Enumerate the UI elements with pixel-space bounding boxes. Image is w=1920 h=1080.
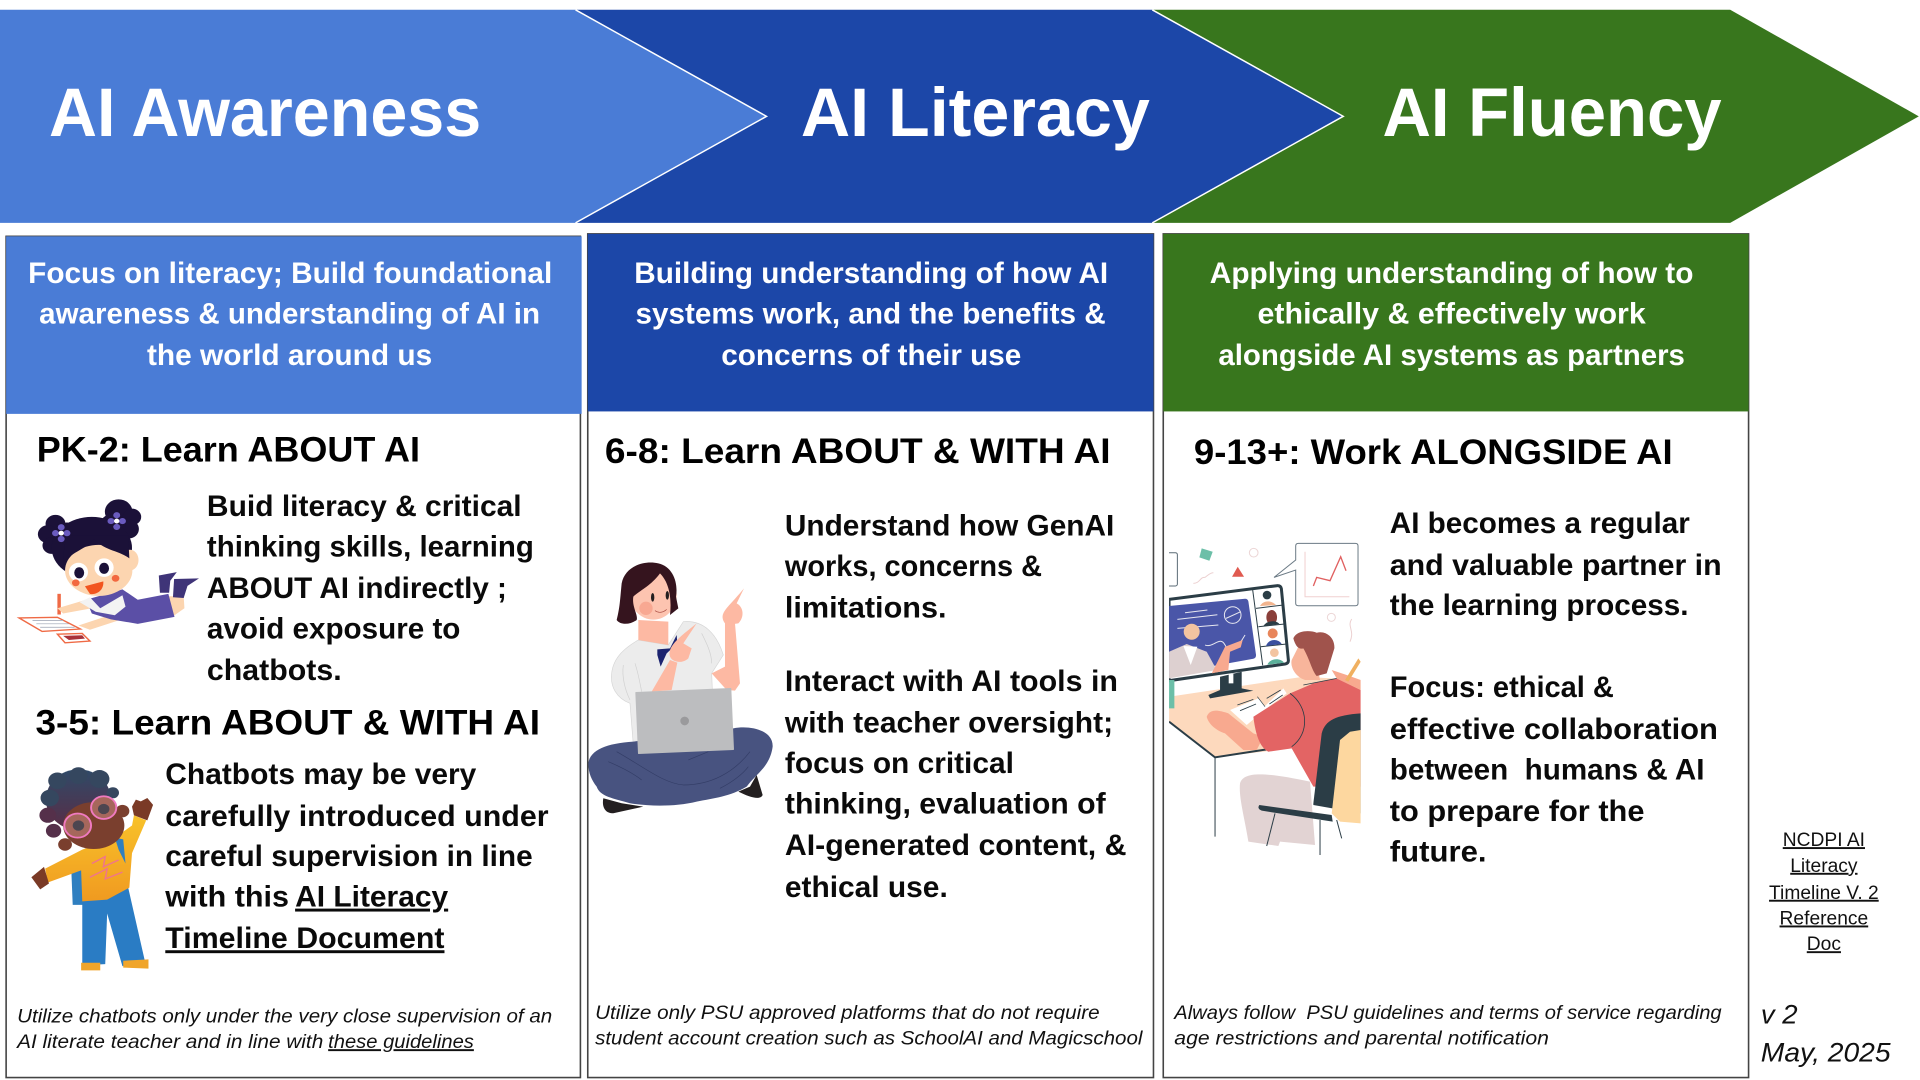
panel header: literacy focus: concerns of their use: [721, 339, 1021, 372]
footnote: PSU guidelines: [1173, 1002, 1722, 1049]
text: PK-2 description: Buid literacy & critical: [207, 490, 522, 523]
footnote: approved platforms: [595, 1002, 1143, 1049]
text: 9-13 focus: between humans & AI: [1390, 753, 1704, 786]
heading: 3-5: 3-5: Learn ABOUT & WITH AI: [36, 703, 540, 743]
icon: woman with laptop: [588, 562, 773, 813]
panel: AI Awareness column: [6, 236, 582, 1078]
text: 3-5 description: Timeline Document: [165, 922, 445, 955]
footnote: PSU guidelines: age restrictions and parental notification: [1174, 1027, 1549, 1049]
text: 6-8 interaction: AI-generated content, &: [785, 829, 1127, 862]
text: PK-2 description: chatbots.: [207, 654, 342, 687]
version note: May, 2025: [1761, 1038, 1892, 1068]
panel header: literacy focus: systems work, and the benefits &: [636, 297, 1106, 330]
text: PK-2 description: avoid exposure to: [207, 612, 460, 645]
text: 3-5 description: careful supervision in line: [165, 840, 533, 873]
link: reference doc: NCDPI AI: [1783, 830, 1865, 851]
icon: girl writing: [19, 499, 199, 643]
panel header: literacy focus: [588, 234, 1153, 411]
panel header: fluency focus: alongside AI systems as partners: [1218, 339, 1685, 372]
footnote: PSU guidelines: Always follow PSU guidelines and terms of service regarding: [1173, 1002, 1722, 1024]
link: reference doc: Reference: [1780, 908, 1868, 929]
link: reference doc: Literacy: [1790, 856, 1858, 877]
text: 9-13 partner: the learning process.: [1390, 589, 1689, 622]
text: 9-13 focus: [1390, 671, 1718, 868]
text: PK-2 description: thinking skills, learning: [207, 530, 534, 563]
text: 6-8 understanding: Understand how GenAI: [785, 510, 1114, 543]
arrow: AI Awareness: [0, 10, 767, 223]
footnote: approved platforms: student account creation such as SchoolAI and Magicschool: [595, 1027, 1143, 1049]
footnote: approved platforms: Utilize only PSU approved platforms that do not require: [595, 1002, 1100, 1024]
text: 3-5 description: AI Literacy: [295, 881, 449, 914]
text: PK-2 description: [207, 490, 534, 687]
text: 6-8 interaction: [784, 665, 1127, 904]
version note: [1761, 1000, 1892, 1068]
heading: 9-13+: 9-13+: Work ALONGSIDE AI: [1194, 432, 1673, 472]
icon: boy waving: [31, 767, 153, 970]
text: 9-13 focus: effective collaboration: [1390, 713, 1718, 746]
footnote: chatbot supervision: Utilize chatbots only under the very close supervision of an: [17, 1005, 552, 1027]
text: 9-13 focus: Focus: ethical &: [1390, 671, 1614, 704]
panel: AI Fluency column: [1157, 234, 1749, 1078]
text: 3-5 description: Chatbots may be very: [165, 758, 477, 791]
arrow: AI Literacy: [576, 10, 1343, 223]
heading: PK-2: PK-2: Learn ABOUT AI: [37, 430, 420, 470]
heading: AI Fluency: AI Fluency: [1382, 74, 1722, 151]
version note: v 2: [1761, 1000, 1798, 1030]
panel header: awareness focus: [6, 236, 582, 414]
panel header: awareness focus: awareness & understanding of AI in: [39, 297, 540, 330]
heading: AI Literacy: AI Literacy: [801, 74, 1150, 151]
text: 3-5 description: [164, 758, 549, 955]
panel header: literacy focus: Building understanding of how AI: [634, 257, 1108, 290]
panel header: fluency focus: [1163, 234, 1749, 411]
footnote: chatbot supervision: [16, 1005, 552, 1053]
panel header: awareness focus: Focus on literacy; Build foundational: [28, 257, 552, 290]
panel header: awareness focus: the world around us: [147, 339, 432, 372]
text: 6-8 interaction: with teacher oversight;: [784, 707, 1113, 740]
text: PK-2 description: ABOUT AI indirectly ;: [207, 572, 507, 605]
text: 6-8 understanding: [784, 510, 1114, 625]
text: 9-13 partner: [1390, 507, 1722, 622]
arrow: AI Fluency: [1152, 10, 1919, 223]
link: reference doc: [1769, 830, 1879, 955]
text: 9-13 partner: AI becomes a regular: [1390, 507, 1690, 540]
panel header: fluency focus: Applying understanding of how to: [1210, 257, 1693, 290]
icon: student at computer: [1157, 543, 1361, 855]
text: 6-8 understanding: limitations.: [785, 592, 947, 625]
text: 3-5 description: carefully introduced under: [165, 800, 549, 833]
text: 9-13 partner: and valuable partner in: [1390, 549, 1722, 582]
text: 6-8 interaction: Interact with AI tools in: [785, 665, 1118, 698]
heading: 6-8: 6-8: Learn ABOUT & WITH AI: [605, 431, 1111, 471]
link: reference doc: Doc: [1807, 934, 1841, 955]
text: 3-5 description: with this: [164, 881, 289, 914]
link: reference doc: Timeline V. 2: [1769, 883, 1879, 904]
footnote: chatbot supervision: these guidelines: [328, 1031, 474, 1053]
panel: AI Literacy column: [588, 234, 1153, 1078]
text: 6-8 interaction: focus on critical: [785, 747, 1014, 780]
text: 6-8 understanding: works, concerns &: [784, 550, 1042, 583]
text: 6-8 interaction: ethical use.: [785, 871, 948, 904]
heading: AI Awareness: AI Awareness: [49, 74, 481, 151]
text: 9-13 focus: future.: [1390, 835, 1487, 868]
panel header: fluency focus: ethically & effectively work: [1258, 297, 1646, 330]
text: 6-8 interaction: thinking, evaluation of: [785, 788, 1106, 821]
footnote: chatbot supervision: AI literate teacher and in line with: [16, 1031, 323, 1053]
text: 9-13 focus: to prepare for the: [1390, 795, 1644, 828]
